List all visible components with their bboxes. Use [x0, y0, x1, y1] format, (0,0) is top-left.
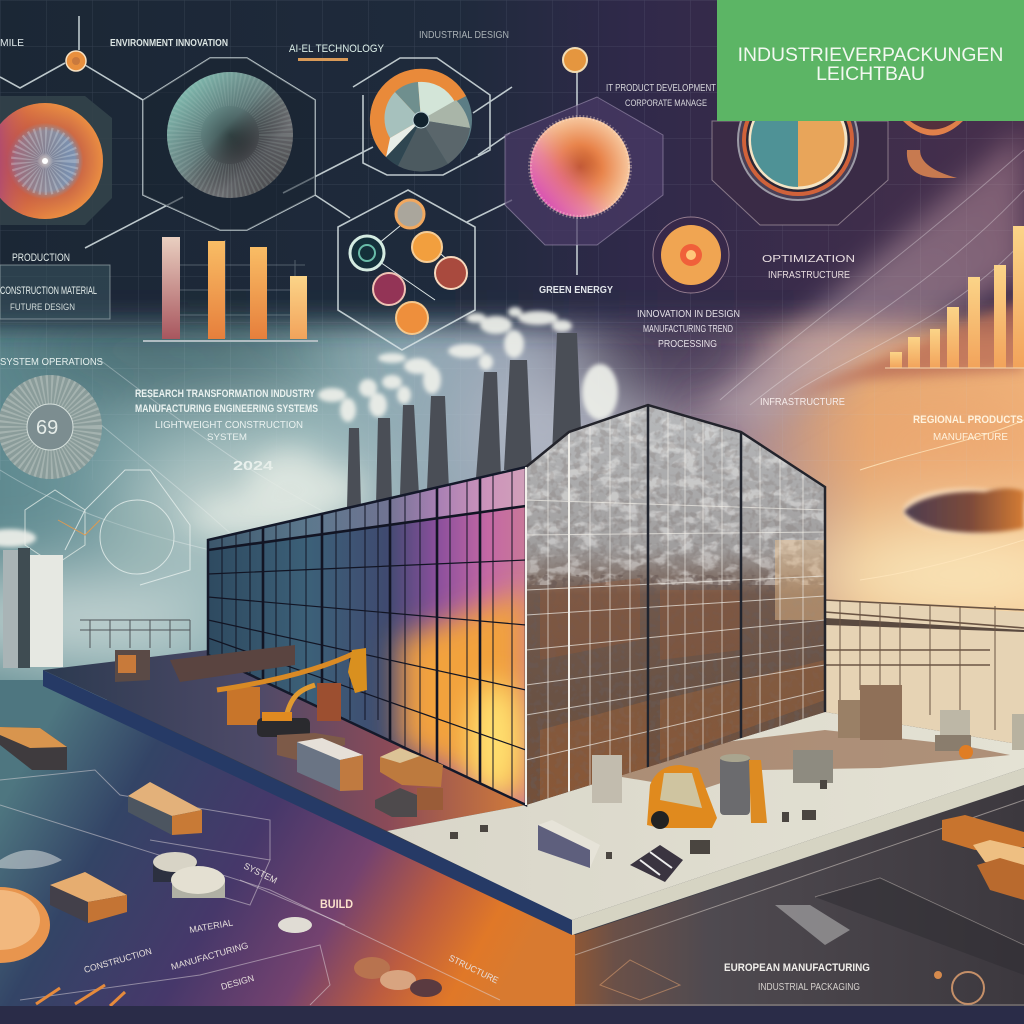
label: lower panel text: MATERIAL	[189, 917, 234, 935]
label: warm centre: INFRASTRUCTURE	[760, 397, 845, 408]
text block: centre: MANUFACTURING TREND	[643, 324, 733, 335]
node: top orange dot	[563, 48, 587, 72]
bottom border strip	[0, 1006, 1024, 1024]
excavator	[217, 648, 367, 737]
title banner: INDUSTRIEVERPACKUNGEN	[738, 44, 1003, 66]
materials bottom left	[0, 727, 225, 963]
bar chart: right	[885, 226, 1024, 368]
panel: grey textured sphere	[0, 375, 102, 479]
site materials left	[115, 645, 295, 682]
text block: right	[913, 414, 1023, 443]
text block: centre left: SYSTEM	[207, 432, 247, 442]
label: lower panel text	[83, 861, 500, 992]
platform	[43, 650, 1024, 935]
label: middle right heading: IT PRODUCT DEVELOPMENT	[606, 83, 716, 94]
panel: orange sphere	[0, 96, 112, 225]
lower floor right	[560, 785, 1024, 1024]
small orange disc	[653, 217, 729, 293]
fuzzy brown ellipse	[903, 488, 1024, 534]
panel: concentric gauge	[712, 80, 888, 225]
panel: bullet circles hexagon	[350, 200, 467, 334]
label: lower panel text: SYSTEM	[242, 861, 279, 886]
crate stacks	[277, 733, 443, 817]
panel: left info box: PRODUCTION	[12, 252, 70, 264]
distant fence	[80, 620, 190, 650]
caption bottom centre: EUROPEAN MANUFACTURING	[724, 962, 870, 974]
molecule diagram	[25, 470, 190, 585]
caption bottom centre	[724, 962, 870, 993]
title banner: LEICHTBAU	[816, 63, 925, 85]
panel outlines on lower floor	[0, 770, 500, 1005]
text block: centre: INNOVATION IN DESIGN	[637, 309, 740, 320]
panel: left info box: FUTURE DESIGN	[10, 302, 75, 312]
label: lower panel text: CONSTRUCTION	[83, 946, 153, 975]
barrel and mast	[720, 754, 767, 823]
panel: grey textured sphere: 69	[36, 417, 58, 439]
scattered debris	[450, 780, 827, 859]
text block: centre left: LIGHTWEIGHT CONSTRUCTION	[155, 420, 303, 431]
lower bottom round items	[36, 917, 442, 1006]
label: top heading three: INDUSTRIAL DESIGN	[419, 30, 509, 41]
forklift	[647, 765, 717, 829]
crates bottom right	[942, 815, 1024, 900]
label: top heading one: ENVIRONMENT INNOVATION	[110, 38, 228, 49]
panel: pie gauge	[370, 69, 472, 172]
label: left mid heading: SYSTEM OPERATIONS	[0, 357, 103, 368]
text block: centre left: 2024	[233, 458, 274, 473]
left distant towers	[3, 548, 63, 668]
label: middle right heading	[606, 83, 716, 108]
reflective film	[775, 878, 1024, 979]
right annex	[825, 600, 1024, 759]
text block: centre left: RESEARCH TRANSFORMATION INDUSTRY	[135, 388, 316, 400]
label: top left fragment: MILE	[0, 38, 24, 49]
text block: centre: PROCESSING	[658, 339, 717, 350]
flowing light streak band	[0, 130, 1024, 590]
node: orange dot	[66, 51, 86, 71]
label: lower panel text: BUILD	[320, 897, 353, 911]
label: lower panel text: DESIGN	[220, 973, 255, 992]
bar chart: left	[143, 237, 318, 341]
panel: glass hexagon with pink sphere	[505, 97, 663, 245]
text block: centre	[637, 309, 740, 350]
factory chimneys	[347, 333, 582, 508]
label: right of disc	[762, 254, 855, 281]
concrete blocks on site	[538, 750, 833, 882]
lower floor left	[0, 680, 575, 1024]
label: mid centre: GREEN ENERGY	[539, 285, 613, 296]
glass hall: left wall	[206, 466, 528, 807]
label: AI technology: AI-EL TECHNOLOGY	[289, 43, 385, 55]
panel: left info box: CONSTRUCTION MATERIAL	[0, 285, 97, 297]
label: middle right heading: CORPORATE MANAGE	[625, 98, 707, 108]
smoke plumes	[0, 307, 618, 547]
hexagon network lines	[0, 16, 577, 350]
reflection lines lower right	[575, 800, 1024, 1005]
label: lower panel text: STRUCTURE	[447, 953, 500, 985]
soft cloud bank	[190, 450, 360, 533]
caption bottom centre: INDUSTRIAL PACKAGING	[758, 982, 860, 993]
title banner	[717, 0, 1024, 121]
panel: left info box	[0, 252, 110, 319]
decorative discs	[903, 121, 963, 178]
panel: teal spiky sphere	[143, 58, 315, 230]
label: right of disc: OPTIMIZATION	[762, 254, 855, 265]
glass hall: right wall	[525, 404, 826, 805]
label: AI technology	[289, 43, 385, 61]
text block: right: MANUFACTURE	[933, 432, 1008, 443]
label: lower panel text: MANUFACTURING	[170, 940, 249, 972]
label: right of disc: INFRASTRUCTURE	[768, 270, 850, 281]
text block: centre left: MANUFACTURING ENGINEERING SYSTEMS	[135, 403, 318, 415]
text block: centre left	[135, 388, 318, 473]
